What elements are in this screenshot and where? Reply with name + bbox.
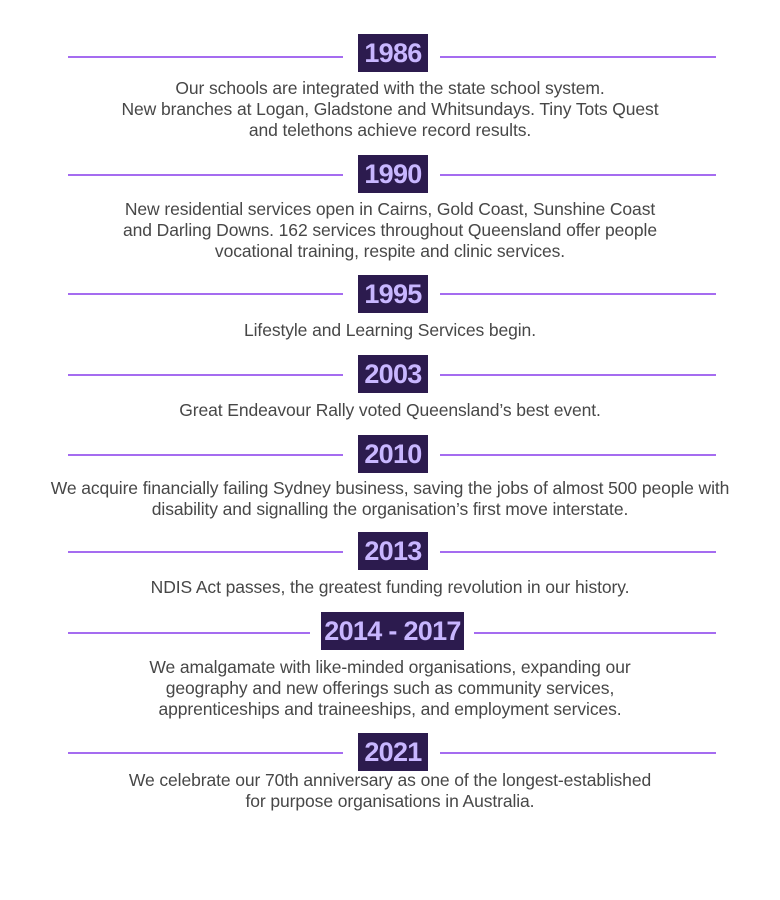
item: 1995 bbox=[68, 275, 716, 340]
item: 2021 bbox=[68, 733, 716, 811]
text: 2010: disability and signalling the organisation’s first move interstate. bbox=[152, 499, 628, 519]
year: 2021: 2021 bbox=[364, 737, 422, 767]
text: 1995: Lifestyle and Learning Services begin. bbox=[244, 320, 536, 340]
item: 1990 bbox=[68, 155, 716, 261]
item: 2003 bbox=[68, 355, 716, 420]
year: 1995 bbox=[358, 275, 428, 313]
text: 2010: We acquire financially failing Sydney business, saving the jobs of almost 500 people with bbox=[51, 478, 729, 498]
year: 2010: 2010 bbox=[364, 439, 422, 469]
year: 2003: 2003 bbox=[364, 359, 422, 389]
text: 1990: vocational training, respite and clinic services. bbox=[215, 241, 565, 261]
text: 2013: NDIS Act passes, the greatest funding revolution in our history. bbox=[151, 577, 629, 597]
text: 2010 bbox=[50, 478, 729, 519]
text: 1990: and Darling Downs. 162 services throughout Queensland offer people bbox=[123, 220, 657, 240]
text: 2021: for purpose organisations in Australia. bbox=[246, 791, 534, 811]
text: 2014-2017 bbox=[149, 657, 631, 719]
text: 2014-2017: We amalgamate with like-minded organisations, expanding our bbox=[149, 657, 631, 677]
year: 1990 bbox=[358, 155, 428, 193]
year: 1986 bbox=[358, 34, 428, 72]
year: 1986: 1986 bbox=[364, 38, 422, 68]
year: 2010 bbox=[358, 435, 428, 473]
text: 2014-2017: apprenticeships and traineeships, and employment services. bbox=[158, 699, 622, 719]
text: 2003: Great Endeavour Rally voted Queensland’s best event. bbox=[179, 400, 601, 420]
text: 1986: New branches at Logan, Gladstone and Whitsundays. Tiny Tots Quest bbox=[122, 99, 658, 119]
text: 2021 bbox=[129, 770, 651, 811]
text: 2021: We celebrate our 70th anniversary as one of the longest-established bbox=[129, 770, 651, 790]
year: 2021 bbox=[358, 733, 428, 771]
year: 2003 bbox=[358, 355, 428, 393]
item: 2013 bbox=[68, 532, 716, 597]
text: 1986: and telethons achieve record results. bbox=[249, 120, 531, 140]
year: 1995: 1995 bbox=[364, 279, 422, 309]
year: 2013 bbox=[358, 532, 428, 570]
text: 1990 bbox=[123, 199, 657, 261]
year: 2013: 2013 bbox=[364, 536, 422, 566]
text: 1986: Our schools are integrated with the state school system. bbox=[175, 78, 605, 98]
item: 2010 bbox=[50, 435, 729, 519]
year: 2014-2017: 2014 - 2017 bbox=[324, 616, 461, 646]
text: 1986 bbox=[122, 78, 658, 140]
item: 2014-2017 bbox=[68, 612, 716, 719]
year: 1990: 1990 bbox=[364, 159, 422, 189]
text: 2014-2017: geography and new offerings such as community services, bbox=[166, 678, 614, 698]
item: 1986 bbox=[68, 34, 716, 140]
text: 1990: New residential services open in Cairns, Gold Coast, Sunshine Coast bbox=[125, 199, 655, 219]
